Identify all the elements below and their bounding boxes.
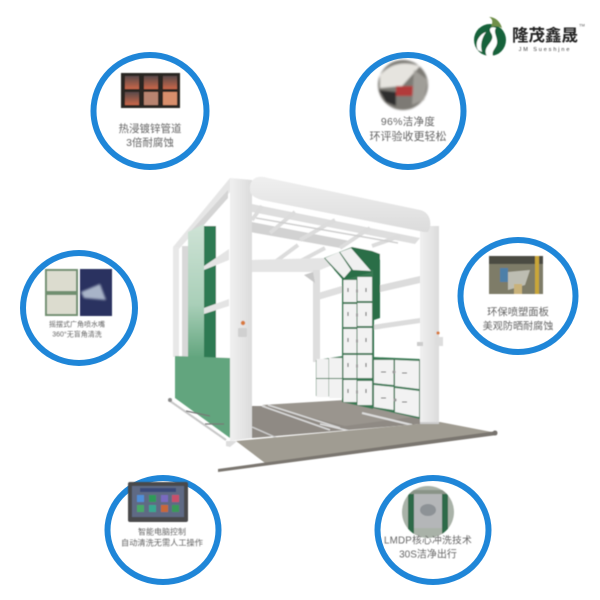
panel: galvanized pipe bbox=[94, 55, 206, 167]
caption: 摇摆式广角喷水嘴 bbox=[49, 320, 105, 328]
trademark: TM bbox=[579, 22, 585, 28]
caption bbox=[370, 115, 446, 143]
central cabinet stack bbox=[324, 247, 373, 409]
caption bbox=[384, 534, 472, 560]
right front column bbox=[417, 226, 443, 424]
caption: 自动清洗无需人工操作 bbox=[121, 538, 203, 548]
ring bbox=[460, 240, 576, 352]
ramp bbox=[218, 422, 498, 472]
caption: 热浸镀锌管道 bbox=[118, 122, 182, 135]
left front column bbox=[226, 178, 252, 447]
left lower rails bbox=[168, 398, 226, 440]
round photo bbox=[400, 486, 456, 538]
caption: 环评验收更轻松 bbox=[370, 129, 446, 143]
right wall lower panels bbox=[316, 356, 420, 419]
ring bbox=[378, 478, 488, 582]
caption bbox=[483, 306, 553, 332]
caption bbox=[118, 122, 182, 149]
photo: panels and spray bbox=[45, 269, 112, 316]
ring bbox=[94, 55, 206, 167]
caption: 智能电脑控制 bbox=[138, 526, 186, 536]
caption: 360°无盲角清洗 bbox=[52, 330, 102, 338]
logo subtitle: JM Sueshjne bbox=[519, 47, 571, 53]
panel: cleanliness bbox=[352, 55, 464, 167]
panel: smart control bbox=[108, 478, 218, 582]
tablet bbox=[128, 482, 188, 522]
panel: LMDP wash bbox=[378, 478, 488, 582]
panel: powder coating bbox=[460, 240, 576, 352]
roof beam bbox=[250, 177, 430, 232]
icon: green leaf logo bbox=[474, 17, 506, 56]
caption: LMDP核心冲洗技术 bbox=[384, 534, 472, 546]
washing machine structure bbox=[168, 177, 498, 472]
logo bbox=[474, 17, 585, 56]
caption: 30S洁净出行 bbox=[399, 548, 457, 560]
left green panel bbox=[175, 356, 230, 438]
caption: 96%洁净度 bbox=[381, 115, 435, 128]
ring bbox=[108, 478, 218, 582]
caption: 环保喷塑面板 bbox=[487, 306, 549, 318]
roof grid bbox=[250, 198, 425, 272]
floor bbox=[252, 400, 420, 438]
caption: 美观防晒耐腐蚀 bbox=[483, 320, 553, 332]
photo grid bbox=[121, 73, 180, 108]
caption: 3倍耐腐蚀 bbox=[126, 136, 174, 149]
left back wall bbox=[173, 178, 230, 358]
back right post and side rails bbox=[304, 270, 420, 362]
ring bbox=[352, 55, 464, 167]
caption bbox=[121, 526, 203, 548]
caption bbox=[49, 320, 105, 338]
panel: spray nozzle bbox=[23, 253, 135, 363]
photo: workshop bbox=[489, 256, 543, 294]
green wall behind right cabinet bbox=[343, 247, 380, 358]
round photo bbox=[378, 60, 428, 110]
logo name: 隆茂鑫晟 bbox=[512, 25, 578, 45]
ring bbox=[23, 253, 135, 363]
